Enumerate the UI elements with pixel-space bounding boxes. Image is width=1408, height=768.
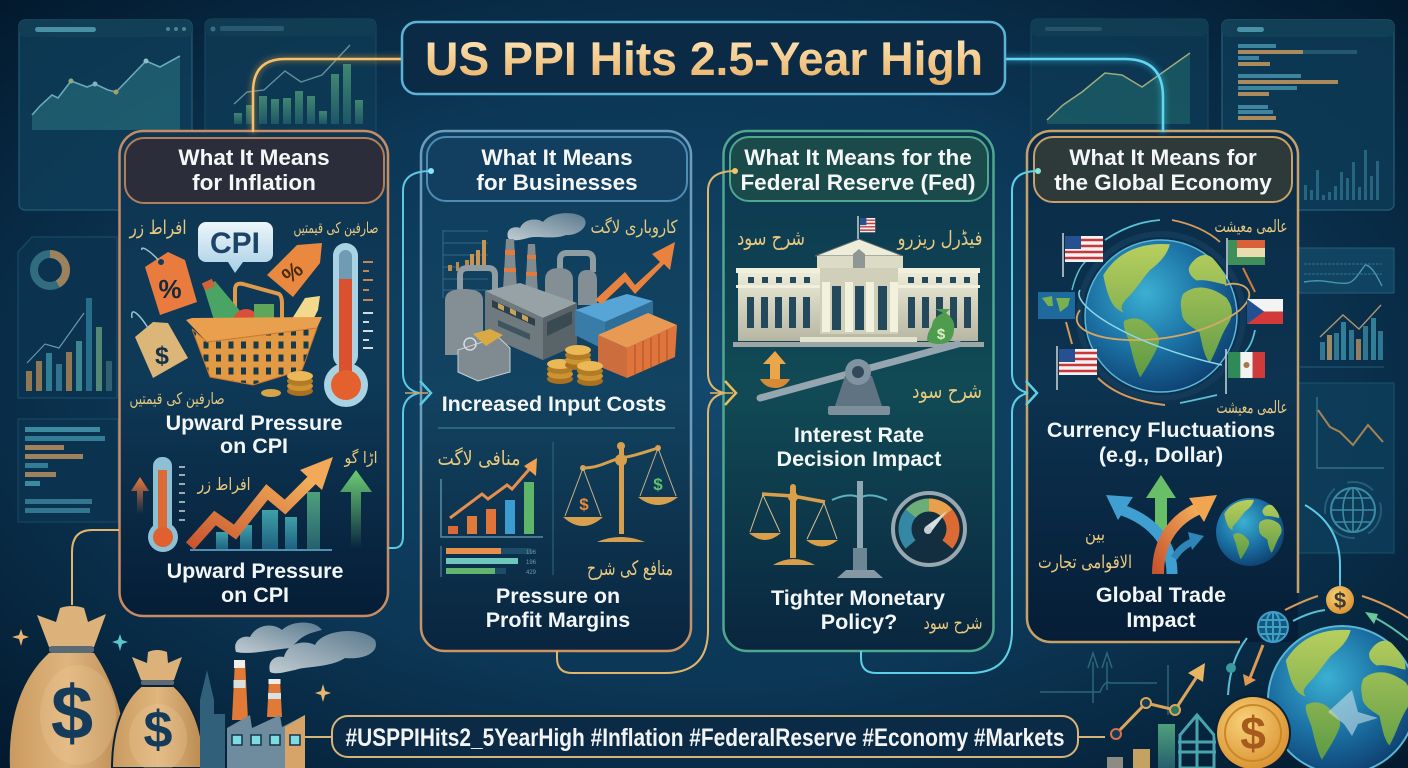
dashboard: right wave — [1298, 248, 1394, 293]
icon: balance scale — [563, 442, 678, 542]
text: upward pressure: on CPI — [220, 434, 288, 458]
icon: large money bag — [10, 606, 125, 768]
icon: coin stacks — [261, 371, 313, 397]
urdu label: interest rate: شرح سود — [737, 226, 805, 250]
title: US PPI Hits 2.5-Year High — [425, 32, 983, 85]
text: pressure on profit margins: Pressure on — [496, 584, 620, 608]
icon: shopping basket — [186, 279, 322, 385]
urdu label: international trade: الاقوامی تجارت — [1038, 552, 1132, 573]
icon: teal building — [1178, 715, 1216, 768]
panel frame — [120, 131, 388, 616]
connector: federal reserve to global economy — [861, 168, 1041, 673]
panel frame — [724, 131, 994, 651]
flag: top right — [1227, 238, 1265, 279]
dashboard: top bar chart — [205, 19, 376, 209]
text: interest rate decision impact — [777, 423, 941, 471]
flag: mexico — [1226, 349, 1265, 394]
urdu label: business cost: کاروباری لاگت — [590, 216, 678, 238]
text: upward pressure repeat — [167, 559, 343, 607]
connector: businesses to federal reserve — [557, 168, 738, 673]
chart: rising bars with arrow — [190, 457, 333, 550]
icon: large globe — [1079, 234, 1243, 398]
icon: rising arrow — [595, 242, 675, 304]
text: pressure on profit margins: Profit Margins — [486, 608, 630, 632]
icon: CPI speech bubble: CPI — [210, 227, 260, 260]
icon: dollar tag: $ — [155, 342, 169, 370]
sparkles — [12, 629, 331, 702]
urdu label: inflation: افراط زر — [129, 217, 186, 239]
text: currency fluctuations: Currency Fluctuations — [1047, 418, 1275, 442]
flag: world map — [1038, 292, 1075, 319]
small chart behind factory — [443, 230, 488, 298]
heading: global economy: the Global Economy — [1054, 170, 1272, 195]
panel: businesses — [421, 131, 691, 651]
dashboard: left horizontal bars — [18, 419, 118, 522]
heading: global economy: What It Means for — [1069, 145, 1257, 170]
icon: percent tag right — [267, 243, 322, 297]
text: tighter monetary policy: Tighter Monetary — [771, 586, 945, 610]
hashtag bar — [305, 716, 1105, 757]
icon: green money bag — [927, 309, 954, 344]
connector: global economy to coin — [1305, 505, 1340, 586]
hashtag bar: #USPPIHits2_5YearHigh #Inflation #FederalReserve #Economy #Markets — [346, 724, 1064, 752]
heading: inflation: What It Means — [178, 145, 330, 170]
icon: big dollar coin — [1215, 695, 1291, 768]
urdu label: inflation small: افراط زر — [197, 475, 250, 495]
dashboard: top-left line chart — [19, 20, 192, 210]
chart: horizontal bars: 196 — [526, 550, 537, 556]
icon: rate up arrow on bowl — [760, 351, 790, 388]
text: tighter monetary policy: Policy? — [821, 610, 897, 634]
icon: balance scale: $ — [579, 495, 589, 514]
icon: coin stacks — [547, 345, 603, 386]
icon: dollar tag — [132, 312, 188, 378]
urdu label: international trade: بین — [1085, 524, 1105, 545]
icon: small up arrow — [131, 477, 149, 514]
urdu label: consumer prices lower: صارفین کی قیمتیں — [130, 389, 224, 409]
chart: horizontal bars: 429 — [526, 570, 537, 576]
heading: federal reserve: What It Means for the — [744, 145, 972, 170]
connector: inflation to money bags — [72, 530, 119, 605]
heading: inflation — [125, 138, 384, 203]
icon: green up arrow — [340, 470, 372, 548]
urdu label: interest rate bottom: شرح سود — [924, 613, 982, 634]
icon: blue container — [575, 294, 653, 350]
urdu label: interest rate mid: شرح سود — [912, 379, 982, 403]
icon: green money bag: $ — [937, 326, 946, 343]
icon: CPI speech bubble — [198, 222, 273, 273]
icon: orange container — [598, 313, 677, 378]
icon: percent tag left — [142, 248, 197, 315]
icon: gauge — [893, 493, 965, 565]
heading: global economy — [1034, 137, 1292, 202]
icon: small dollar coin: $ — [1334, 588, 1346, 613]
connector: inflation to businesses — [388, 168, 434, 548]
text: tighter monetary policy — [771, 586, 945, 634]
chart: horizontal bars: 196 — [526, 560, 537, 566]
panel frame — [421, 131, 691, 651]
panel: inflation — [120, 131, 388, 616]
text: currency fluctuations — [1047, 418, 1275, 467]
text: interest rate decision impact: Interest Rate — [794, 423, 924, 447]
dashboard: right bars with line — [1300, 305, 1384, 367]
connector: title to inflation — [253, 59, 402, 131]
icon: large money bag: $ — [51, 671, 93, 756]
flag: united states top — [1063, 233, 1103, 277]
icon: thermometer large — [324, 243, 373, 407]
icon: blue scale — [832, 481, 887, 578]
icon: federal reserve building — [733, 216, 984, 347]
dashboard: right falling line and globe — [1298, 383, 1394, 553]
panel: global economy — [1027, 131, 1298, 642]
urdu label: global economy bottom: عالمی معیشت — [1216, 398, 1288, 418]
text: currency fluctuations: (e.g., Dollar) — [1099, 443, 1223, 467]
panel frame — [1027, 131, 1298, 642]
text: interest rate decision impact: Decision Impact — [777, 447, 941, 471]
text: global trade impact: Global Trade — [1096, 583, 1226, 607]
icon: trade arrows — [1106, 475, 1217, 574]
icon: small money bag: $ — [144, 701, 173, 759]
dashboard: top-right line chart — [1031, 19, 1208, 209]
arrowhead and node — [1226, 612, 1378, 686]
icon: factory — [200, 660, 305, 768]
text: increased input costs: Increased Input Costs — [442, 392, 666, 416]
icon: golden scale — [749, 484, 838, 565]
icon: big dollar coin: $ — [1240, 707, 1266, 759]
text: upward pressure — [166, 411, 342, 458]
flag: united states lower — [1057, 346, 1097, 390]
icon: thermometer small — [148, 457, 185, 552]
icon: small dollar coin — [1326, 586, 1354, 614]
text: upward pressure repeat: Upward Pressure — [167, 559, 343, 583]
icon: percent tag right: % — [277, 257, 308, 288]
orbit arcs — [1228, 596, 1408, 695]
text: global trade impact — [1096, 583, 1226, 632]
panel border — [1027, 131, 1298, 642]
flag: czech — [1247, 299, 1283, 324]
chart: margin bars — [441, 458, 543, 537]
heading: federal reserve — [730, 137, 988, 201]
divider — [438, 427, 675, 429]
icon: seesaw — [760, 344, 958, 415]
dashboard: left donut and bars — [18, 237, 117, 398]
heading: businesses — [427, 137, 687, 201]
icon: percent tag left: % — [158, 274, 182, 304]
urdu label: federal reserve: فیڈرل ریزرو — [897, 226, 982, 250]
urdu label: global economy top: عالمی معیشت — [1214, 217, 1288, 237]
icon: small globe — [1216, 498, 1284, 566]
background dashboards — [18, 19, 1394, 553]
panel: federal reserve — [724, 131, 994, 651]
chart: rising line with bars — [1107, 663, 1205, 768]
chart: horizontal bars — [441, 546, 537, 577]
orbit arrows — [1066, 220, 1255, 405]
text: upward pressure: Upward Pressure — [166, 411, 342, 435]
icon: small money bag — [112, 650, 204, 768]
text: global trade impact: Impact — [1126, 608, 1196, 632]
dashboard: top-right bars — [1222, 20, 1394, 210]
title — [402, 22, 1005, 94]
heading: businesses: for Businesses — [476, 170, 638, 195]
heading: businesses: What It Means — [481, 145, 633, 170]
icon: factory smoke — [235, 622, 376, 673]
icon: smoke — [507, 213, 586, 240]
urdu label: consumer prices: صارفین کی قیمتیں — [294, 219, 378, 237]
connector: title to global economy — [1006, 59, 1163, 131]
heading: inflation: for Inflation — [192, 170, 316, 195]
icon: balance scale: $ — [653, 475, 663, 494]
text: pressure on profit margins — [486, 584, 630, 632]
urdu label: international trade — [1038, 524, 1132, 573]
text: upward pressure repeat: on CPI — [221, 583, 289, 607]
urdu label: profit cost: منافی لاگت — [438, 446, 520, 470]
urdu label: rising: اڑا گو — [344, 448, 378, 468]
icon: big globe — [1268, 626, 1408, 768]
icon: factory machinery — [445, 239, 597, 381]
bottom-right cluster — [1040, 586, 1408, 768]
icon: grid globe — [1258, 612, 1288, 642]
faint arrows — [1040, 653, 1168, 715]
urdu label: profit rate: منافع کی شرح — [587, 556, 673, 580]
heading: federal reserve: Federal Reserve (Fed) — [740, 170, 976, 195]
